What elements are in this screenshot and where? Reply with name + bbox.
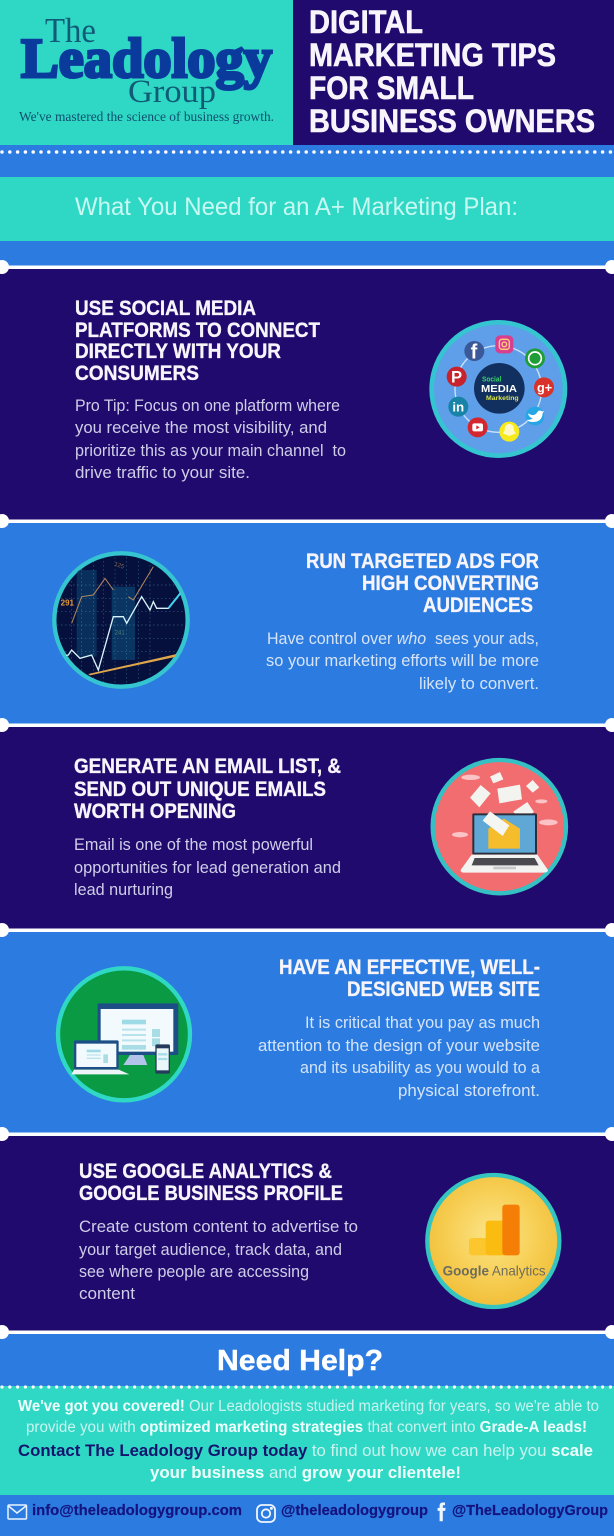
facebook handle: @TheLeadologyGroup [452,1502,608,1519]
section 5 body: content [79,1285,135,1303]
section 3 body: lead nurturing [74,881,173,899]
section 1 body: you receive the most visibility, and [75,419,327,437]
section 1 body [75,397,346,482]
icon: social media wheel: Marketing [486,395,519,402]
section 5 body: your target audience, track data, and [79,1241,342,1259]
section 4 body: attention to the design of your website [258,1037,540,1055]
section 3 heading [74,754,341,823]
icon: instagram [257,1505,275,1522]
section 1 body: Pro Tip: Focus on one platform where [75,397,340,415]
logo: Leadology: Leadology [21,28,272,90]
section 2 panel: targeted ads [52,551,539,692]
icon: social media wheel: MEDIA [481,384,517,395]
logo: Group: Group [128,74,216,110]
section 3 panel: email list [0,727,614,931]
section 5 body: see where people are accessing [79,1263,309,1281]
section 2 body [266,630,539,693]
title: FOR SMALL [309,70,474,106]
icon: stock chart: 241 [115,631,125,637]
section 5 panel: google analytics [0,1136,614,1333]
section 2 body: likely to convert. [419,675,539,693]
help panel [0,1386,614,1495]
section 3 body: opportunities for lead generation and [74,859,341,877]
contact call to action: your business and grow your clientele! [150,1463,461,1482]
email address: info@theleadologygroup.com [32,1502,242,1519]
section 1 panel: social media [0,269,614,521]
section 3 heading: GENERATE AN EMAIL LIST, & [74,754,341,778]
icon: social media wheel: g+ [537,381,552,395]
section 5 body: Create custom content to advertise to [79,1218,358,1236]
help paragraph [18,1398,599,1436]
logo tagline: We've mastered the science of business growth. [19,109,274,124]
section 3 heading: WORTH OPENING [74,799,236,823]
section 2 body: so your marketing efforts will be more [266,652,539,670]
section 4 body: physical storefront. [398,1082,540,1100]
section 4 body [258,1014,541,1100]
section 5 body [79,1218,358,1303]
section 5 heading: USE GOOGLE ANALYTICS & [79,1159,332,1183]
icon: social media wheel: P [451,368,462,387]
contact call to action [18,1441,593,1482]
instagram handle: @theleadologygroup [281,1502,428,1519]
section 2 heading: HIGH CONVERTING [362,571,539,595]
section 5 heading: GOOGLE BUSINESS PROFILE [79,1181,343,1205]
section 3 body [74,836,341,899]
icon: stock chart: 125 [113,562,125,571]
logo: The: The [45,11,96,50]
header: logo panel [0,0,293,145]
section 1 heading [75,296,320,385]
section 4 body: It is critical that you pay as much [305,1014,540,1032]
section 1 heading: CONSUMERS [75,361,199,385]
icon: google analytics badge: Google Analytics [443,1263,546,1279]
header: title panel [293,0,614,145]
icon: responsive devices [58,968,190,1100]
title: DIGITAL [309,4,423,40]
footer contacts [8,1502,608,1522]
title [309,4,595,139]
divider lines with end knobs [0,260,614,1339]
contact call to action: Contact The Leadology Group today to find out how we can help you scale [18,1441,593,1460]
section 4 heading [279,955,540,1001]
icon: social media wheel: Social [482,374,501,383]
section 4 heading: DESIGNED WEB SITE [347,977,540,1001]
section 2 heading: AUDIENCES [423,593,533,617]
icon: social media wheel [432,322,565,456]
section 3 heading: SEND OUT UNIQUE EMAILS [74,777,326,801]
icon: facebook [438,1502,446,1521]
subtitle: What You Need for an A+ Marketing Plan: [75,193,518,221]
Need Help heading: Need Help? [217,1345,383,1377]
section 1 body: drive traffic to your site. [75,464,250,482]
section 1 heading: DIRECTLY WITH YOUR [75,339,281,363]
help paragraph: We've got you covered! Our Leadologists studied marketing for years, so we're able to [18,1398,599,1415]
help paragraph: provide you with optimized marketing strategies that convert into Grade-A leads! [26,1419,587,1436]
icon: social media wheel: f [471,342,478,364]
section 1 body: prioritize this as your main channel to [75,442,346,460]
section 4 body: and its usability as you would to a [300,1059,541,1077]
title: MARKETING TIPS [309,37,556,73]
icon: social media wheel: in [452,399,464,414]
section 3 body: Email is one of the most powerful [74,836,313,854]
icon: google analytics badge [427,1175,559,1307]
section 2 body: Have control over who sees your ads, [267,630,539,648]
section 4 heading: HAVE AN EFFECTIVE, WELL- [279,955,540,979]
icon: email laptop [433,760,566,893]
section 2 heading: RUN TARGETED ADS FOR [306,549,539,573]
subtitle band [0,177,614,241]
section 4 panel: web site [0,932,614,1135]
icon: mail [8,1505,26,1519]
section 1 heading: USE SOCIAL MEDIA [75,296,256,320]
section 2 heading [306,549,539,617]
section 5 heading [79,1159,343,1205]
section 1 heading: PLATFORMS TO CONNECT [75,318,320,342]
icon: stock chart: 291 [61,598,75,607]
icon: stock chart [53,553,190,687]
